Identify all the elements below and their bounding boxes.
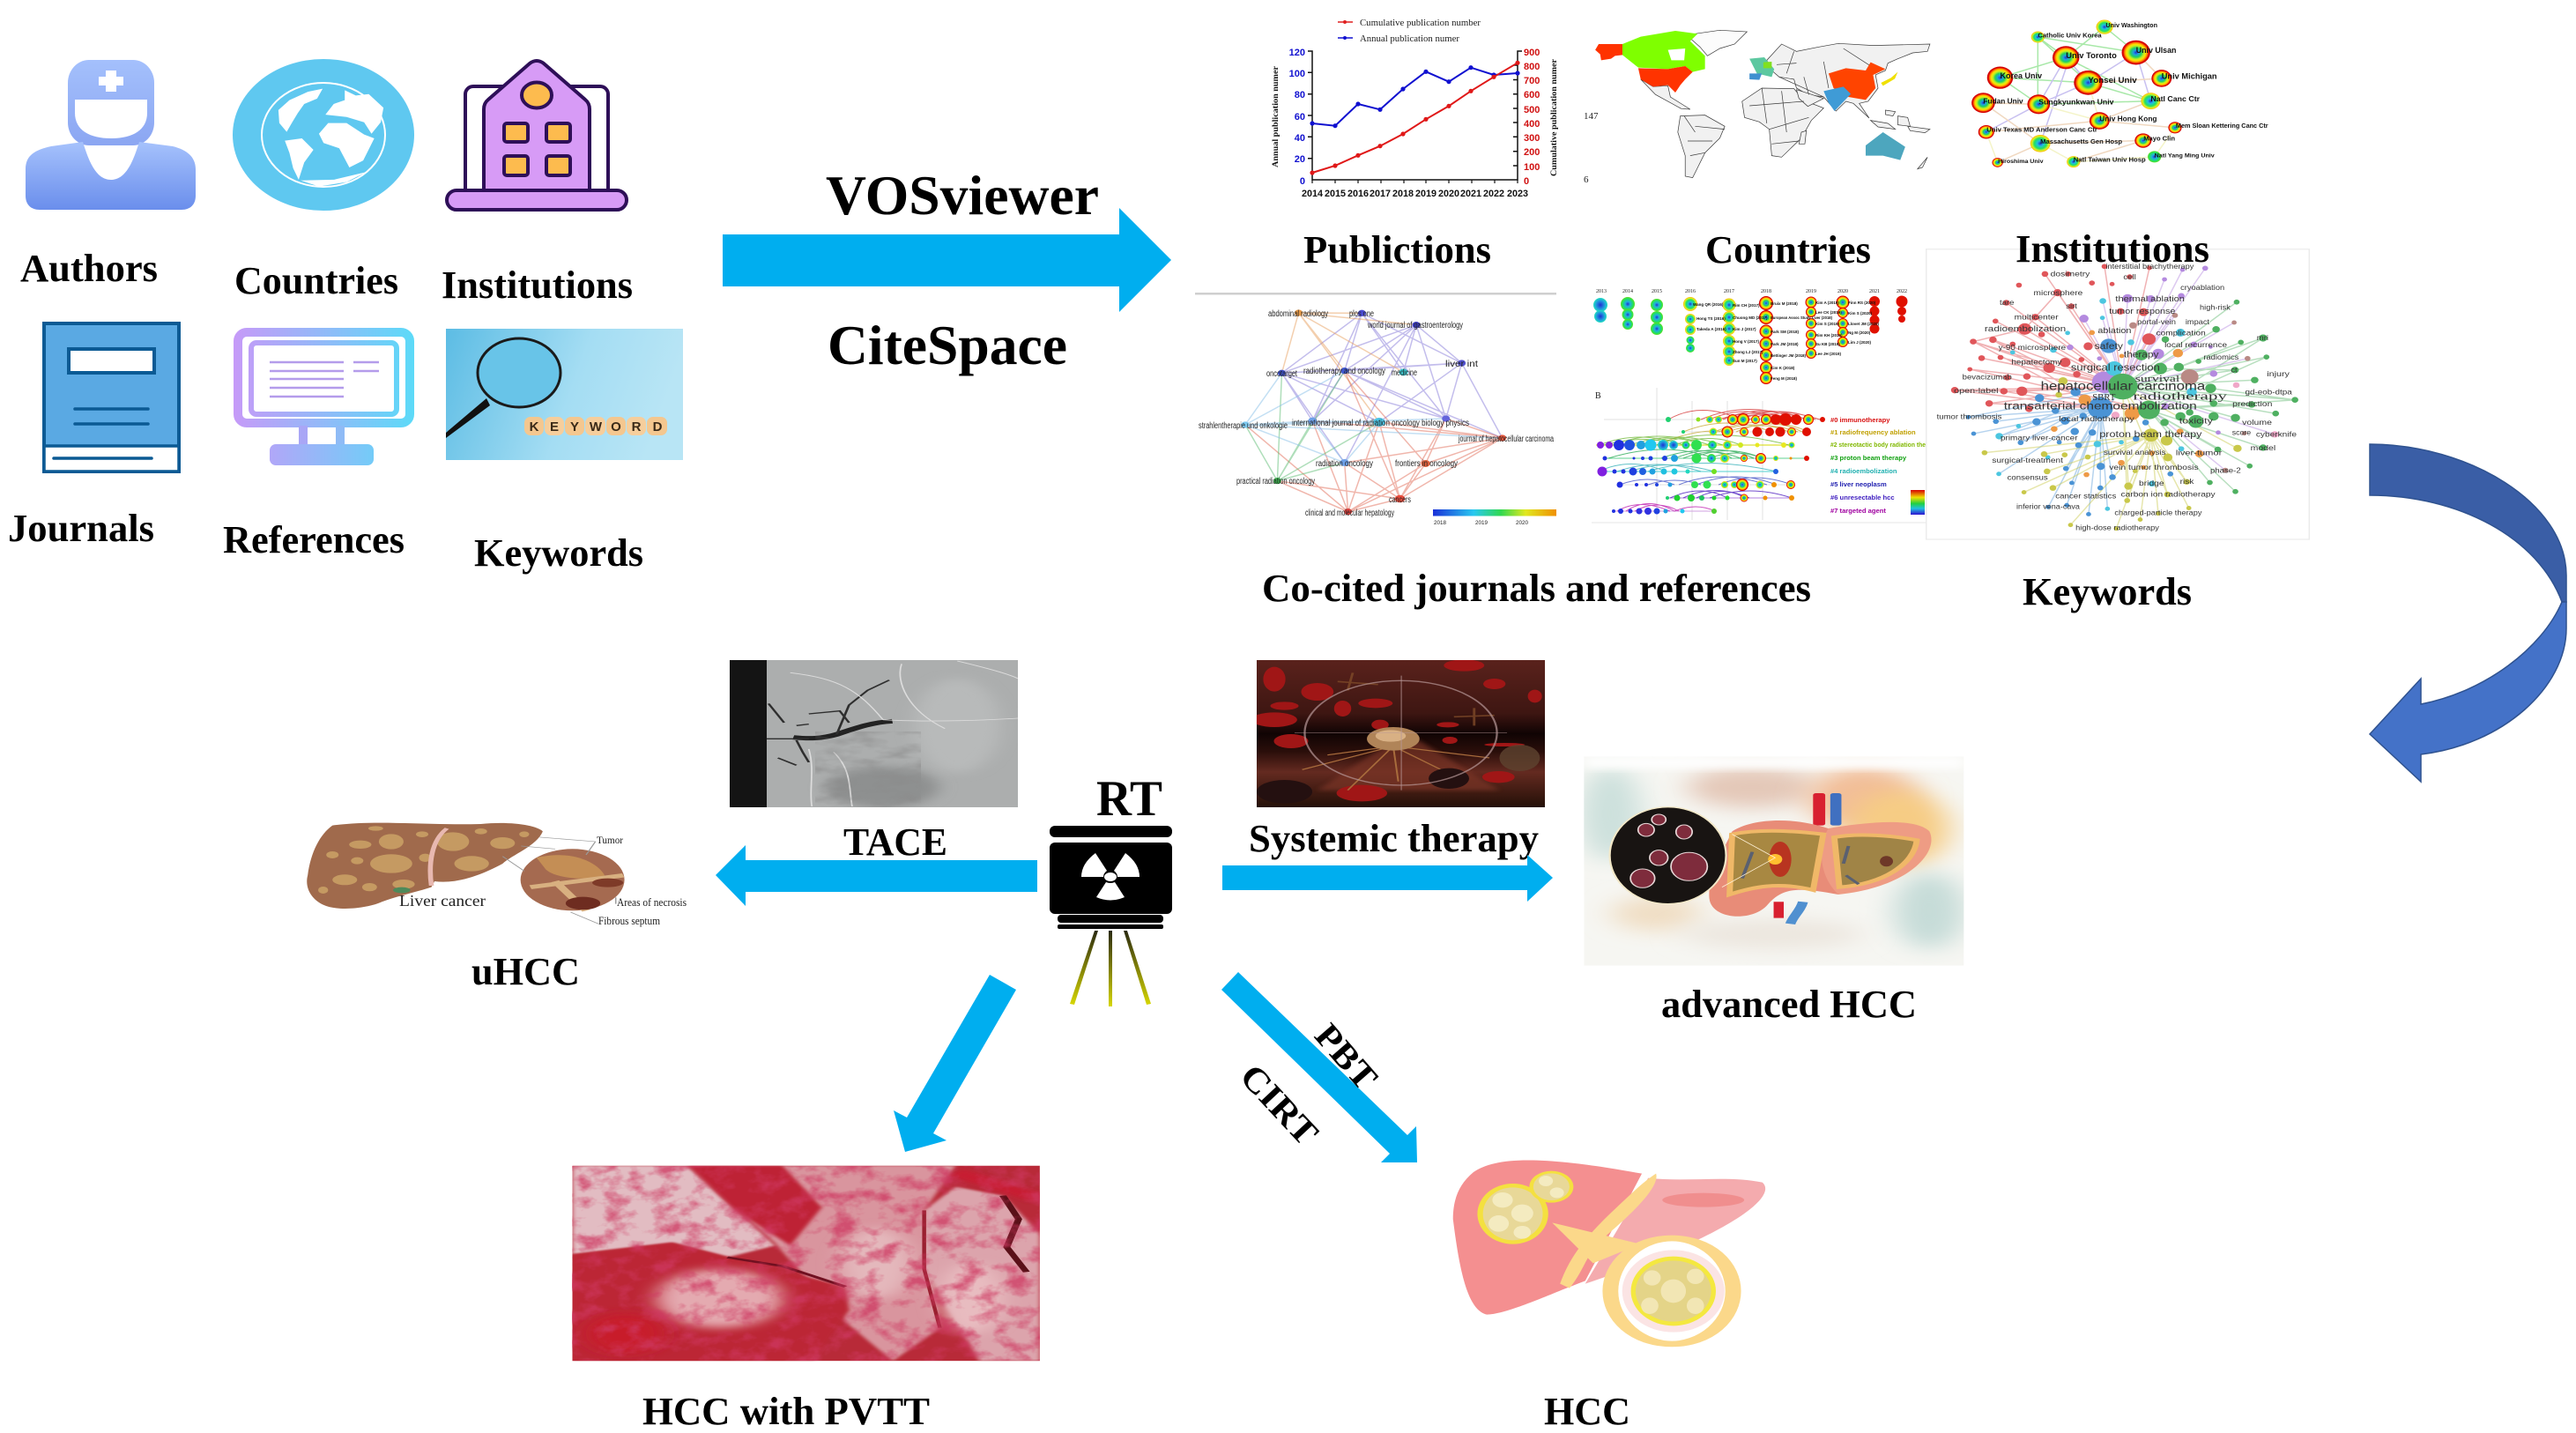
panel: keyword co-occurrence network: high-dose radiotherapy: [2075, 523, 2159, 531]
arrow: top main: [723, 208, 1171, 312]
chart: citation timeline A: Ng M (2020): [1848, 330, 1871, 335]
chart: publications line chart: 2019: [1415, 189, 1436, 199]
image: uHCC liver illustration: Tumor: [597, 834, 623, 846]
panel: keyword co-occurrence network: portal-vein: [2137, 318, 2176, 326]
chart: publications line chart: 100: [1524, 162, 1540, 173]
row 4 nodes: [1597, 467, 1778, 476]
chart: publications line chart: 800: [1524, 62, 1540, 72]
panel: keyword co-occurrence network: interstitial brachytherapy: [2105, 262, 2194, 271]
chart: citation timeline A: Wang QR (2016): [1693, 302, 1724, 307]
chart: publications line chart: 900: [1524, 48, 1540, 58]
panel: keyword co-occurrence network: vein tumor thrombosis: [2109, 463, 2199, 471]
image: advanced HCC illustration: [1580, 756, 1965, 966]
chart: institutions network: Fudan Univ: [1983, 97, 2023, 105]
chart: citation timeline A: Kim J (2017): [1733, 327, 1756, 331]
panel: keyword co-occurrence network: tumor thrombosis: [1937, 412, 2002, 420]
chart: citation timeline A: European Assoc Study Liver (2018): [1771, 316, 1832, 320]
chart: publications line chart: 500: [1524, 105, 1540, 115]
row 5 nodes: [1616, 479, 1795, 491]
cluster labels: #3 proton beam therapy: [1830, 454, 1907, 462]
panel: keyword co-occurrence network: microsphere: [2034, 289, 2082, 297]
panel: keyword co-occurrence network: primary liver-cancer: [2001, 434, 2078, 442]
cluster labels: #7 targeted agent: [1830, 507, 1886, 515]
chart: institutions network: Massachusetts Gen Hosp: [2040, 137, 2122, 145]
chart: citation timeline A: 2015: [1652, 289, 1662, 294]
chart: citation timeline A: Chuong MD (2017): [1733, 316, 1768, 320]
row 1 nodes: [1681, 427, 1811, 437]
chart: institutions network: Univ Ulsan: [2136, 47, 2176, 56]
row 6 nodes: [1666, 494, 1794, 502]
letter cubes: KEYWORD: O: [611, 420, 621, 434]
label: HCC with PVTT: HCC with PVTT: [642, 1389, 930, 1433]
chart: co-cited journals network: plos one: [1349, 309, 1374, 319]
panel: keyword co-occurrence network: prediction: [2232, 400, 2272, 408]
chart: citation timeline A: Kim K (2018): [1771, 366, 1795, 370]
image: uHCC liver illustration: [307, 823, 687, 927]
panel: keyword co-occurrence network: score: [2232, 428, 2251, 436]
panel: keyword co-occurrence network: sirt: [2066, 302, 2077, 310]
chart: institutions network: Natl Taiwan Univ Hosp: [2074, 156, 2146, 163]
letter cubes: KEYWORD: R: [632, 420, 642, 434]
panel: keyword co-occurrence network: consensus: [2008, 473, 2048, 481]
panel: keyword co-occurrence network: tumor response: [2109, 308, 2175, 316]
chart: publications line chart: 100: [1289, 69, 1305, 79]
panel: keyword co-occurrence network: local radiotherapy: [2059, 415, 2135, 423]
letter cubes: KEYWORD: E: [550, 420, 559, 434]
chart: citation timeline A: Kim A (2019): [1815, 301, 1839, 305]
panel: keyword co-occurrence network: complication: [2157, 329, 2206, 337]
chart: citation timeline A: 2020: [1837, 289, 1848, 294]
chart: publications line chart: Cumulative publication number: [1360, 19, 1481, 28]
image: keyword magnifier: [446, 329, 683, 460]
letter cubes: KEYWORD: K: [530, 420, 539, 434]
icon: references monitor: [238, 332, 410, 465]
chart: co-cited journals network: [1195, 293, 1556, 526]
chart: citation timeline A: Takeda A (2016): [1696, 327, 1726, 331]
label: RT: RT: [1096, 771, 1162, 827]
chart: citation timeline A: Park JM (2018): [1771, 342, 1799, 346]
image: uHCC liver illustration: Fibrous septum: [598, 914, 660, 927]
letter cubes: KEYWORD: Y: [570, 420, 579, 434]
cluster labels: #0 immunotherapy: [1830, 416, 1890, 424]
panel: keyword co-occurrence network: open-label: [1954, 387, 1999, 395]
panel: keyword co-occurrence network: injury: [2267, 370, 2290, 378]
chart: cluster timeline B: B: [1595, 391, 1601, 401]
chart: citation timeline A: Lee JH (2019): [1815, 352, 1842, 356]
panel: keyword co-occurrence network: hepatocellular carcinoma: [2041, 381, 2206, 393]
label: Countries: Countries: [234, 258, 398, 302]
chart: citation timeline A: Finn RS (2020): [1848, 301, 1876, 305]
chart: citation timeline A: Kim S (2019): [1815, 322, 1840, 326]
arrow: left to uHCC: [716, 845, 1037, 906]
panel: keyword co-occurrence network: phase-2: [2210, 466, 2241, 474]
chart: publications line chart: 2015: [1325, 189, 1346, 199]
panel: keyword co-occurrence network: survival: [2135, 375, 2179, 384]
label: Institutions network heading: Institutions: [2016, 226, 2209, 271]
chart: citation timeline A: Bruix M (2018): [1771, 301, 1798, 306]
label: uHCC: uHCC: [471, 949, 580, 993]
icon: institutions building: [447, 61, 627, 210]
image: uHCC liver illustration: Areas of necrosis: [617, 895, 687, 909]
label: PBT: PBT: [1307, 1015, 1386, 1098]
chart: institutions network: Natl Yang Ming Univ: [2155, 152, 2215, 159]
label: Keywords network heading: Keywords: [2023, 569, 2192, 613]
arrow: right to advanced HCC: [1222, 855, 1553, 902]
row 3 nodes: [1602, 453, 1809, 464]
cluster labels: #6 unresectable hcc: [1830, 494, 1895, 501]
chart: citation timeline A: 2019: [1806, 289, 1816, 294]
label: CiteSpace: CiteSpace: [828, 315, 1067, 376]
chart: citation timeline A: Hong TS (2016): [1696, 316, 1726, 321]
image: systemic therapy tumour: [1251, 659, 1545, 807]
chart: co-cited journals network: abdominal radiology: [1268, 309, 1328, 319]
cluster labels: #1 radiofrequency ablation: [1830, 428, 1916, 436]
label: References: References: [223, 517, 405, 561]
panel: keyword co-occurrence network: bridge: [2139, 479, 2164, 487]
panel: keyword co-occurrence network: carbon ion radiotherapy: [2121, 490, 2216, 498]
chart: citation timeline A: Zhong LJ (2017): [1733, 350, 1763, 354]
label: VOSviewer: VOSviewer: [826, 165, 1099, 226]
row 2 nodes: [1597, 439, 1794, 451]
chart: citation timeline A: Rim KH (2019): [1815, 333, 1843, 338]
chart: institutions network: Univ Hong Kong: [2099, 115, 2157, 123]
chart: publications line chart: 700: [1524, 76, 1540, 86]
chart: publications line chart: 400: [1524, 119, 1540, 130]
chart: institutions network: Mem Sloan Kettering Canc Ctr: [2176, 123, 2268, 130]
chart: citation timeline A: Feng M (2018): [1771, 376, 1798, 381]
chart: citation timeline A: Lee CK (2019): [1815, 310, 1842, 315]
chart: publications line chart: 20: [1295, 154, 1305, 165]
chart: citation timeline A: Bettinger JM (2018): [1771, 353, 1806, 358]
image: TACE angiogram: [730, 660, 1018, 808]
chart: citation timeline A: 2022: [1897, 289, 1907, 294]
panel: keyword co-occurrence network: transarterial chemoembolization: [2004, 399, 2197, 412]
image: PVTT tissue photo: [572, 1166, 1040, 1361]
arrow: curved blue: [2370, 444, 2566, 782]
row 7 nodes: [1612, 508, 1717, 515]
label: Systemic therapy: Systemic therapy: [1249, 816, 1539, 860]
chart: co-cited journals network: international journal of radiation oncology biology physics: [1292, 419, 1469, 428]
chart: citation timeline A: Lim J (2020): [1848, 340, 1872, 345]
panel: keyword co-occurrence network: cell: [2123, 273, 2136, 281]
panel: keyword co-occurrence network: local recurrence: [2164, 341, 2227, 349]
cluster labels: #2 stereotactic body radiation the: [1830, 441, 1926, 449]
panel: keyword co-occurrence network: cancer statistics: [2055, 492, 2117, 500]
chart: publications line chart: Annual publication numer: [1360, 34, 1460, 44]
panel: keyword co-occurrence network: volume: [2242, 418, 2272, 427]
icon: countries globe: [233, 59, 414, 211]
chart: citation timeline A: 2013: [1596, 289, 1607, 294]
cluster labels: #5 liver neoplasm: [1830, 480, 1887, 488]
label: advanced HCC: advanced HCC: [1661, 982, 1917, 1026]
chart: citation timeline A: Rim CH (2017): [1733, 303, 1760, 308]
chart: institutions network: Korea Univ: [2000, 72, 2043, 81]
icon: radiotherapy machine: [1050, 826, 1172, 1006]
chart: co-cited journals network: 2020: [1516, 520, 1528, 526]
panel: keyword co-occurrence network: risk: [2180, 478, 2194, 486]
panel: keyword co-occurrence network: impact: [2186, 318, 2210, 326]
liver: [1709, 820, 1838, 917]
letter cubes: KEYWORD: [524, 417, 667, 435]
image: HCC liver illustration: [1453, 1160, 1765, 1344]
panel: keyword co-occurrence network: safety: [2095, 341, 2124, 352]
panel: keyword co-occurrence network: mri: [2257, 334, 2268, 342]
chart: institutions network: Univ Texas MD Anderson Canc Ctr: [1986, 126, 2097, 134]
label: Co-cited journals and references: Co-cited journals and references: [1262, 566, 1811, 610]
chart: citation timeline A: 2018: [1761, 289, 1771, 294]
letter cubes: KEYWORD: W: [590, 420, 603, 434]
chart: co-cited journals network: cancers: [1389, 495, 1411, 505]
panel: keyword co-occurrence network: surgical-treatment: [1992, 457, 2063, 464]
panel: keyword co-occurrence network: ablation: [2097, 327, 2131, 336]
chart: co-cited journals network: 2018: [1434, 520, 1446, 526]
chart: co-cited journals network: radiation oncology: [1316, 459, 1373, 469]
label: Countries map heading: Countries: [1705, 227, 1871, 271]
chart: institutions network: Natl Canc Ctr: [2150, 95, 2201, 103]
chart: citation timeline A: 2014: [1622, 289, 1633, 294]
chart: co-cited journals network: medicine: [1392, 368, 1417, 378]
chart: publications line chart: Cumulative publication numer: [1550, 58, 1559, 176]
chart: co-cited journals network: frontiers in oncology: [1395, 459, 1458, 469]
chart: world map of countries: 6: [1584, 174, 1589, 185]
label: TACE: TACE: [843, 820, 947, 864]
chart: publications line chart: 2023: [1507, 189, 1528, 199]
chart: citation timeline A: Su KB (2019): [1815, 342, 1840, 346]
chart: citation timeline A: Park SM (2018): [1771, 330, 1800, 334]
chart: publications line chart: 2020: [1438, 189, 1459, 199]
chart: publications line chart: 2017: [1370, 189, 1391, 199]
chart: publications line chart: 2014: [1302, 189, 1324, 199]
chart: institutions network: Mayo Clin: [2143, 135, 2175, 142]
chart: co-cited journals network: journal of hepatocellular carcinoma: [1458, 434, 1554, 444]
panel: keyword co-occurrence network: therapy: [2124, 350, 2159, 360]
chart: publications line chart: 40: [1295, 133, 1305, 144]
chart: publications line chart: 2016: [1347, 189, 1369, 199]
panel: keyword co-occurrence network: gd-eob-dtpa: [2245, 388, 2292, 396]
chart: institutions network: Sungkyunkwan Univ: [2038, 98, 2114, 107]
cluster labels: [1830, 416, 1926, 515]
label: Keywords left: Keywords: [474, 531, 643, 575]
chart: co-cited journals network: 2019: [1475, 520, 1488, 526]
chart: publications line chart: 2018: [1392, 189, 1414, 199]
label: CIRT: CIRT: [1232, 1056, 1326, 1153]
chart: citation timeline A: Sun M (2017): [1733, 359, 1757, 363]
panel: keyword co-occurrence network: cyberknife: [2256, 430, 2297, 438]
chart: citation timeline A: 2021: [1869, 289, 1880, 294]
chart: publications line chart: 60: [1295, 112, 1305, 123]
chart: publications line chart: 200: [1524, 147, 1540, 158]
chart: co-cited journals network: world journal of gastroenterology: [1367, 321, 1463, 330]
chart: institutions network: Univ Toronto: [2066, 52, 2117, 61]
chart: co-cited journals network: liver int: [1445, 360, 1478, 369]
chart: citation timeline A: Kim S (2020): [1848, 311, 1873, 316]
label: Publictions: Publictions: [1303, 227, 1491, 271]
panel: keyword co-occurrence network: hepatectomy: [2011, 358, 2062, 367]
chart: co-cited journals network: radiotherapy and oncology: [1303, 367, 1385, 376]
chart: co-cited journals network: oncotarget: [1266, 369, 1297, 379]
chart: citation timeline A: 2017: [1724, 289, 1734, 294]
cluster labels: #4 radioembolization: [1830, 467, 1897, 475]
chart: world map of countries: [1584, 30, 1930, 185]
chart: institutions network: Univ Washington: [2105, 22, 2157, 29]
chart: publications line chart: 0: [1300, 176, 1305, 187]
panel: keyword co-occurrence network: inferior vena-cava: [2016, 502, 2080, 511]
chart: institutions network: Catholic Univ Korea: [2038, 32, 2103, 39]
icon: journals book: [44, 323, 179, 471]
panel: keyword co-occurrence network: tare: [2000, 299, 2014, 307]
chart: publications line chart: 2022: [1483, 189, 1504, 199]
panel: keyword co-occurrence network: charged-particle therapy: [2114, 509, 2202, 516]
chart: institutions network: [1971, 19, 2268, 167]
panel: keyword co-occurrence network: [1926, 249, 2309, 539]
panel: keyword co-occurrence network: thermal ablation: [2115, 295, 2185, 304]
chart: institutions network: Hiroshima Univ: [1998, 158, 2044, 165]
image: uHCC liver illustration: Liver cancer: [399, 892, 486, 910]
chart: institutions network: Yonsei Univ: [2088, 77, 2137, 85]
panel: keyword co-occurrence network: ct: [2231, 366, 2238, 374]
chart: citation timeline A: 2016: [1685, 289, 1696, 294]
panel: keyword co-occurrence network: liver-tumor: [2176, 449, 2222, 457]
chart: publications line chart: 80: [1295, 90, 1305, 100]
panel: keyword co-occurrence network: model: [2251, 443, 2275, 452]
panel: keyword co-occurrence network: proton beam therapy: [2099, 430, 2202, 440]
panel: keyword co-occurrence network: cryoablation: [2180, 284, 2224, 292]
chart: publications line chart: 300: [1524, 133, 1540, 144]
chart: institutions network: Univ Michigan: [2162, 72, 2217, 82]
row 0 nodes: [1666, 413, 1825, 426]
chart: citation timeline A: [1593, 289, 1907, 384]
panel: keyword co-occurrence network: high-risk: [2200, 303, 2231, 311]
panel: keyword co-occurrence network: radioembolization: [1985, 324, 2066, 334]
panel: keyword co-occurrence network: surgical resection: [2071, 363, 2160, 373]
panel: keyword co-occurrence network: survival analysis: [2104, 449, 2166, 457]
chart: publications line chart: 2021: [1460, 189, 1481, 199]
chart: publications line chart: Annual publication numer: [1272, 65, 1281, 167]
label: HCC: HCC: [1544, 1389, 1630, 1433]
panel: keyword co-occurrence network: radiomics: [2203, 353, 2239, 361]
chart: publications line chart: 0: [1524, 176, 1529, 187]
chart: co-cited journals network: practical radiation oncology: [1236, 477, 1315, 486]
chart: publications line chart: 600: [1524, 90, 1540, 100]
panel: keyword co-occurrence network: dosimetry: [2051, 270, 2090, 278]
chart: citation timeline A: Hong V (2017): [1733, 339, 1760, 344]
panel: keyword co-occurrence network: radiotherapy: [2133, 390, 2228, 403]
label: Institutions: Institutions: [442, 263, 633, 307]
chart: publications line chart: [1272, 19, 1559, 199]
panel: keyword co-occurrence network: y-90 microsphere: [1999, 344, 2066, 352]
chart: cluster timeline B: [1592, 388, 1926, 523]
timeline rows: [1596, 388, 1824, 520]
arrow: down-left to PVTT: [894, 975, 1016, 1152]
chart: co-cited journals network: clinical and molecular hepatology: [1305, 509, 1394, 518]
label: Journals: Journals: [8, 506, 154, 550]
panel: keyword co-occurrence network: bevacizumab: [1963, 373, 2012, 381]
letter cubes: KEYWORD: D: [653, 420, 663, 434]
panel: keyword co-occurrence network: multicenter: [2015, 313, 2059, 321]
chart: citation timeline A: Llovet JM (2020): [1848, 322, 1880, 326]
panel: keyword co-occurrence network: SBRT: [2092, 393, 2115, 403]
icon: authors doctor: [26, 60, 196, 210]
chart: world map of countries: 147: [1584, 111, 1599, 122]
arrow: down-right to HCC: [1221, 972, 1417, 1162]
chart: publications line chart: 120: [1289, 48, 1305, 58]
panel: keyword co-occurrence network: toxicity: [2179, 417, 2214, 426]
chart: co-cited journals network: strahlentherapie und onkologie: [1199, 421, 1288, 431]
label: Authors: Authors: [20, 246, 158, 290]
